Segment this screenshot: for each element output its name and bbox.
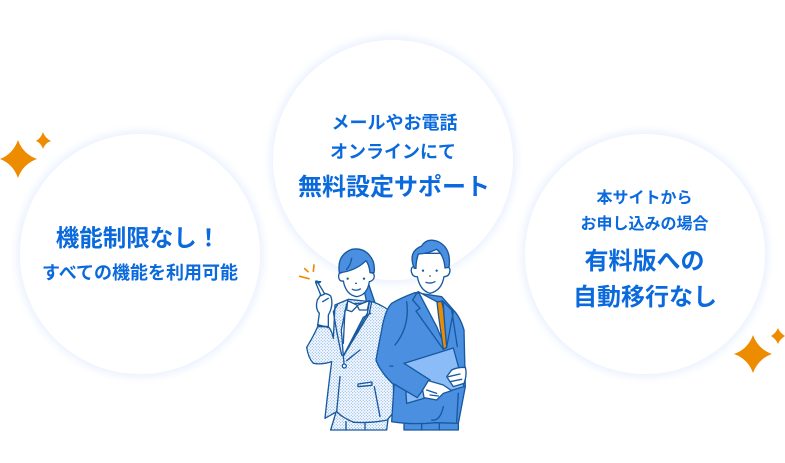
man hands bbox=[447, 367, 466, 387]
woman head bbox=[339, 260, 374, 297]
man coat bbox=[376, 293, 465, 424]
man head bbox=[411, 253, 450, 293]
illustration: two business people bbox=[300, 240, 466, 430]
heading: to paid version: 有料版への bbox=[584, 248, 704, 275]
icon: emphasis marks bbox=[300, 265, 314, 279]
heading: no automatic migration: 自動移行なし bbox=[573, 284, 717, 311]
woman legs bbox=[331, 410, 388, 430]
circle: right panel bbox=[525, 134, 765, 374]
man sleeve bbox=[393, 363, 430, 398]
circle: center panel bbox=[273, 40, 513, 280]
heading: free setup support: 無料設定サポート bbox=[298, 174, 490, 201]
circle: left panel bbox=[20, 134, 260, 374]
man lapels bbox=[390, 292, 458, 422]
woman hair bbox=[339, 249, 374, 273]
man trousers bbox=[404, 420, 458, 430]
text: from this site: 本サイトから bbox=[596, 190, 693, 207]
text: when applying: お申し込みの場合 bbox=[580, 216, 709, 233]
heading: no feature limits: 機能制限なし！ bbox=[56, 225, 220, 251]
woman shirt bbox=[341, 303, 369, 356]
icon: large sparkle left bbox=[0, 140, 37, 178]
text: all features available: すべての機能を利用可能 bbox=[42, 263, 238, 283]
text: email and phone: メールやお電話 bbox=[332, 113, 458, 133]
man shirt bbox=[418, 292, 445, 347]
icon: small sparkle left bbox=[36, 132, 51, 149]
woman jacket bbox=[307, 299, 394, 423]
icon: small sparkle right bbox=[771, 328, 785, 344]
text: online: オンラインにて bbox=[330, 142, 456, 162]
man hair bbox=[412, 240, 449, 268]
icon: large sparkle right bbox=[734, 335, 772, 373]
woman bbox=[307, 249, 394, 430]
man bbox=[376, 240, 466, 430]
woman back hair bbox=[363, 280, 375, 305]
man tie bbox=[437, 301, 447, 349]
folder bbox=[404, 348, 464, 403]
woman hand bbox=[317, 282, 332, 327]
